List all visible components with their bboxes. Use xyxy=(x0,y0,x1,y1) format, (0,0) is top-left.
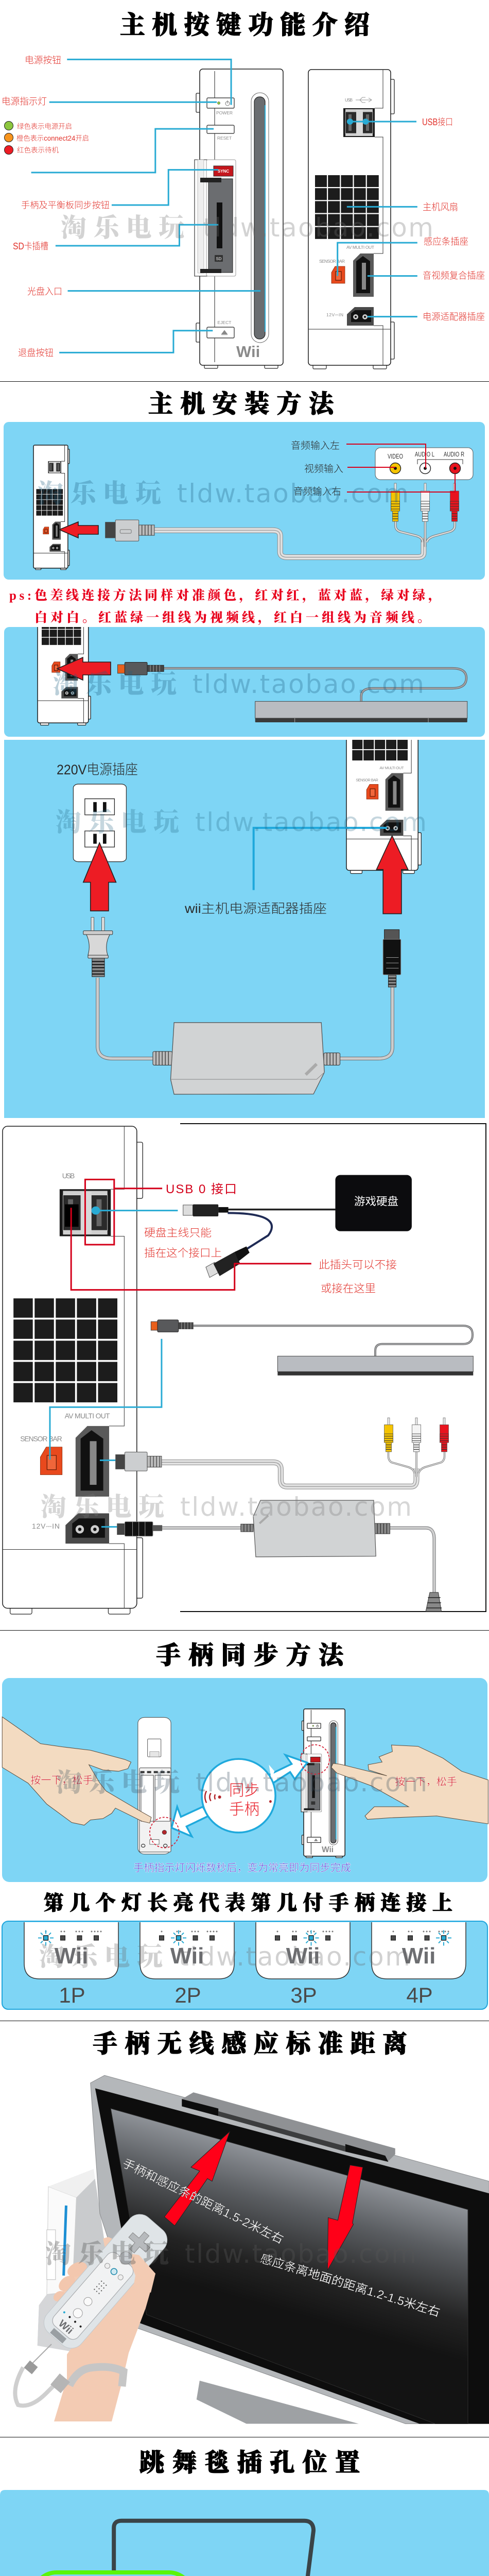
panel: AV cable connection xyxy=(4,422,485,580)
label: sync: 同步 xyxy=(229,1782,259,1799)
wii remote back xyxy=(138,1717,171,1854)
card 1P: Wii xyxy=(55,1943,88,1969)
panel: dance mat connection xyxy=(0,2490,489,2576)
watermark: tldw.taobao.com xyxy=(179,1942,410,1972)
back of console: SENSOR BAR xyxy=(319,259,345,264)
wii remote xyxy=(39,2209,172,2354)
panel: full wiring diagram xyxy=(3,1124,486,1614)
note: main cable port: 硬盘主线只能 xyxy=(144,1227,212,1239)
label: AV socket: 音视频复合插座 xyxy=(423,270,485,281)
note: sync complete: 手柄指示灯闪烁数秒后，变为常亮即为同步完成 xyxy=(133,1862,351,1874)
sync bubble and arrows xyxy=(150,1745,329,1848)
watermark xyxy=(38,479,409,509)
console back cropped: AV MULTI OUT xyxy=(379,766,404,770)
card 4P: 4P xyxy=(406,1983,433,2007)
note: main cable port xyxy=(144,1227,222,1259)
watermark: tldw.taobao.com xyxy=(180,1492,412,1522)
indicator legend: 绿色表示电源开启 xyxy=(17,123,72,130)
front of console xyxy=(195,69,283,368)
console back, small xyxy=(33,445,69,570)
label: USB ports: USB接口 xyxy=(422,117,453,127)
arrow: to outlet xyxy=(83,843,116,911)
watermark: tldw.taobao.com xyxy=(193,669,424,699)
note: optional plug: 或接在这里 xyxy=(321,1283,376,1295)
label: audio in left: 音频输入左 xyxy=(291,440,340,451)
card 2P: 2P xyxy=(174,1983,201,2007)
note: color cable matching: 白对白。红蓝绿一组线为视频线，红白一组线为音频线。 xyxy=(34,610,430,625)
label: fan: 主机风扇 xyxy=(423,202,458,212)
console back cropped xyxy=(346,740,422,874)
thumb and wrist strap xyxy=(15,2254,155,2405)
large console back xyxy=(3,1126,143,1614)
indicator legend: 橙色表示connect24开启 xyxy=(16,134,89,142)
note: main cable port: 插在这个接口上 xyxy=(144,1247,222,1259)
watermark: 淘乐电玩 xyxy=(56,1768,180,1797)
panel: player LEDs xyxy=(2,1921,487,2009)
TV socket panel: AUDIO R xyxy=(444,450,464,458)
label: power button: 电源按钮 xyxy=(25,55,61,65)
blue leader line xyxy=(254,828,387,890)
title: console setup: 主机安装方法 xyxy=(148,391,336,418)
arrow xyxy=(59,522,98,538)
large console back: 12V⎓IN xyxy=(32,1522,60,1530)
watermark xyxy=(53,669,424,699)
sensor cable and bar xyxy=(117,663,467,722)
RCA plugs xyxy=(391,483,459,521)
label: power indicator: 电源指示灯 xyxy=(2,96,47,107)
watermark: 淘乐电玩 xyxy=(39,1942,163,1971)
wall outlet xyxy=(73,784,126,862)
label: adapter socket: wii主机电源适配器插座 xyxy=(184,902,327,916)
console behind TV xyxy=(38,2169,108,2357)
dance mat box xyxy=(33,2572,193,2576)
panel: console button diagram xyxy=(2,55,485,369)
watermark: tldw.taobao.com xyxy=(196,1768,427,1798)
label: video in: 视频输入 xyxy=(304,463,343,474)
panel: power adapter connection xyxy=(4,740,485,1118)
label: sensor bar socket: 感应条插座 xyxy=(424,236,468,247)
note: optional plug: 此插头可以不接 xyxy=(319,1259,397,1271)
large console back: USB xyxy=(62,1172,75,1180)
front of console: POWER xyxy=(216,110,233,115)
label: controller: 手柄 xyxy=(229,1801,259,1818)
card 1P: 1P xyxy=(59,1983,85,2007)
arrow xyxy=(57,657,111,680)
back of console: 12V⎓IN xyxy=(326,312,343,317)
label: eject button: 退盘按钮 xyxy=(18,348,54,358)
label: audio in right: 音频输入右 xyxy=(293,486,341,497)
sensor bar xyxy=(182,2092,395,2162)
label: SD slot: SD卡插槽 xyxy=(13,241,48,251)
card 1P xyxy=(24,1922,118,2007)
TV socket panel xyxy=(375,448,473,480)
callout lines xyxy=(31,59,417,352)
cables and accessories xyxy=(50,1175,473,1612)
front console small: Wii xyxy=(322,1845,334,1854)
watermark xyxy=(61,213,433,243)
label: press and release, right: 按一下，松手 xyxy=(395,1776,457,1788)
card 2P xyxy=(140,1922,234,2007)
back of console: AV MULTI OUT xyxy=(346,245,374,250)
watermark: 淘乐电玩 xyxy=(41,1493,164,1521)
card 3P: Wii xyxy=(286,1943,320,1969)
card 3P xyxy=(256,1922,350,2007)
note: optional plug xyxy=(319,1259,397,1295)
mat cable xyxy=(114,2521,313,2576)
back of console xyxy=(308,70,394,369)
frame xyxy=(180,1124,486,1612)
label: power adapter socket: 电源适配器插座 xyxy=(423,312,485,322)
console back cropped: SENSOR BAR xyxy=(356,777,378,782)
front of console: SYNC xyxy=(218,169,229,174)
back of console: USB xyxy=(345,97,353,103)
watermark xyxy=(41,1492,412,1522)
adapter with plugs xyxy=(83,917,401,1094)
heading: LED meaning: 第几个灯长亮代表第几付手柄连接上 xyxy=(44,1892,452,1914)
title: controller sync: 手柄同步方法 xyxy=(156,1642,346,1669)
hand holding remote xyxy=(51,2237,155,2421)
label: controller distance: 手柄和感应条的距离1.5-2米左右 xyxy=(120,2156,286,2246)
indicator legend xyxy=(4,122,89,155)
watermark xyxy=(45,2239,416,2269)
title: console button functions: 主机按键功能介绍 xyxy=(120,11,370,39)
title: dance mat port: 跳舞毯插孔位置 xyxy=(139,2449,360,2477)
label: 220V socket: 220V电源插座 xyxy=(57,762,138,777)
TV xyxy=(91,2075,489,2424)
note: color cable matching: ps:色差线连接方法同样对准颜色，红对红，蓝对蓝，绿对绿， xyxy=(9,588,441,603)
console back cropped xyxy=(37,627,91,725)
red leader lines xyxy=(346,444,455,492)
indicator legend: 红色表示待机 xyxy=(17,146,59,154)
watermark xyxy=(39,1942,410,1972)
card 4P xyxy=(372,1922,466,2007)
watermark xyxy=(56,807,427,837)
watermark: tldw.taobao.com xyxy=(195,807,427,837)
TV socket panel: VIDEO xyxy=(388,452,403,460)
arrow: sensor bar to floor xyxy=(327,2165,363,2270)
watermark: 淘乐电玩 xyxy=(45,2240,169,2268)
panel: sync method xyxy=(2,1678,488,1882)
panel: sensor bar connection xyxy=(4,627,485,737)
right hand xyxy=(331,1745,488,1824)
title: wireless distance: 手柄无线感应标准距离 xyxy=(93,2030,407,2058)
label: sync button: 手柄及平衡板同步按钮 xyxy=(21,200,110,210)
left hand xyxy=(2,1717,151,1825)
front of console: SD xyxy=(216,257,222,261)
AV cable xyxy=(105,520,455,557)
RCA plugs xyxy=(384,1418,449,1452)
front of console: EJECT xyxy=(218,320,231,325)
label: disc slot: 光盘入口 xyxy=(27,286,62,297)
card 4P: Wii xyxy=(402,1943,435,1969)
illustration: TV with sensor bar and controller xyxy=(15,2075,489,2424)
label: sensor height: 感应条离地面的距离1.2-1.5米左右 xyxy=(259,2251,442,2319)
TV socket panel: AUDIO L xyxy=(415,450,434,458)
watermark xyxy=(56,1768,427,1798)
wii remote: Wii xyxy=(56,2318,75,2336)
label: press and release, left: 按一下，松手 xyxy=(30,1774,93,1786)
label: game hard disk: 游戏硬盘 xyxy=(354,1196,398,1208)
large console back: SENSOR BAR xyxy=(20,1434,62,1443)
watermark: tldw.taobao.com xyxy=(203,213,433,243)
note: color cable matching xyxy=(9,588,441,625)
watermark: tldw.taobao.com xyxy=(177,479,409,509)
watermark: 淘乐电玩 xyxy=(56,808,179,837)
label: USB 0 port: USB 0 接口 xyxy=(166,1182,237,1196)
arrow: controller to sensor bar xyxy=(164,2131,230,2226)
front of console: RESET xyxy=(217,135,232,141)
watermark: 淘乐电玩 xyxy=(38,479,161,508)
large console back: AV MULTI OUT xyxy=(65,1412,110,1420)
front of console: Wii xyxy=(236,343,260,361)
arrow: to console xyxy=(376,836,408,914)
watermark: tldw.taobao.com xyxy=(185,2239,416,2269)
watermark: 淘乐电玩 xyxy=(53,670,177,699)
card 2P: Wii xyxy=(170,1943,204,1969)
front console small xyxy=(301,1709,345,1858)
watermark: 淘乐电玩 xyxy=(61,213,184,242)
card 3P: 3P xyxy=(290,1983,317,2007)
